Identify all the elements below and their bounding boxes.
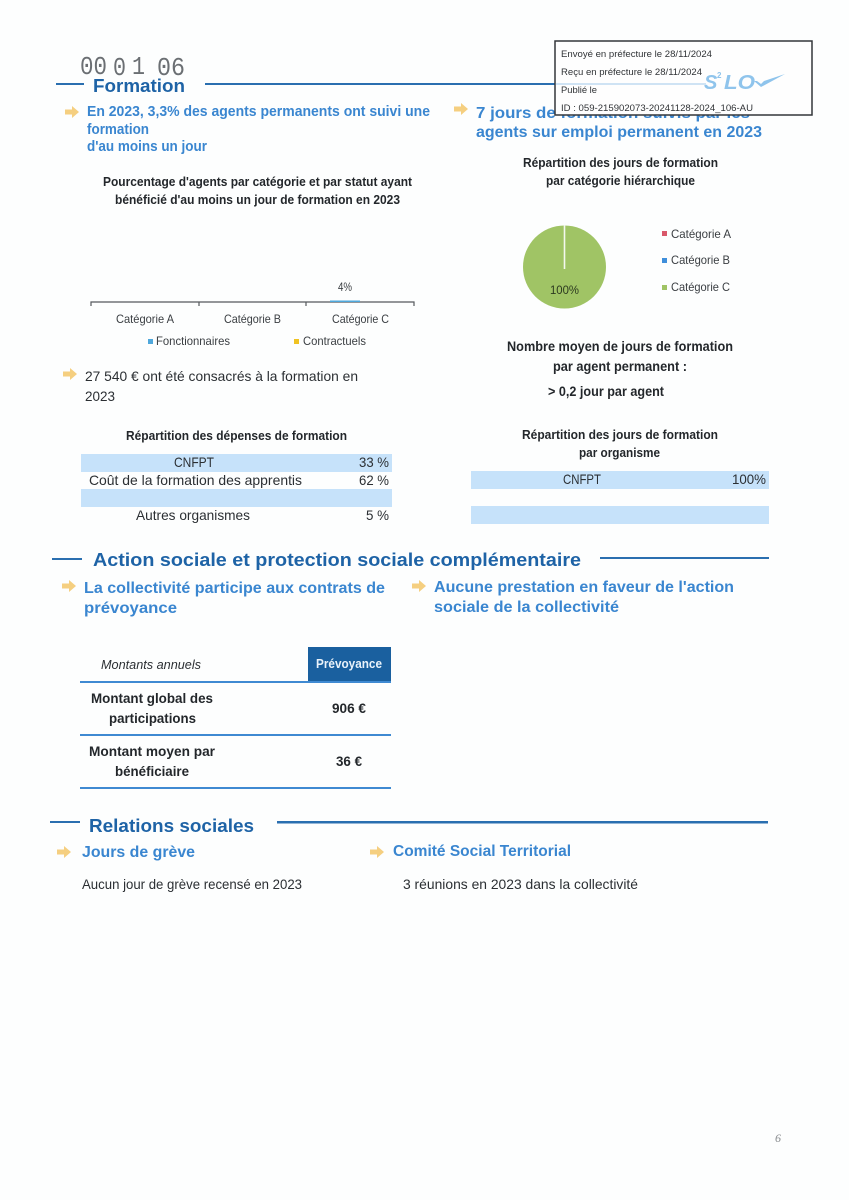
- chart title: agents by category: bénéficié d'au moins un jour de formation en 2023: [115, 193, 400, 207]
- table: days by organisation: par organisme: [579, 446, 660, 460]
- bar chart: agents by category: 4%: [338, 280, 352, 294]
- pie chart: days by category: Catégorie C: [671, 280, 730, 294]
- chart title: days by category: Répartition des jours de formation: [523, 156, 718, 170]
- table: training expenses: 62 %: [359, 472, 389, 488]
- stamp number: [80, 52, 185, 83]
- table: prévoyance amounts: Prévoyance: [316, 656, 382, 671]
- callout: days of training: [454, 103, 762, 141]
- callout: no social benefit: Aucune prestation en faveur de l'action: [434, 579, 734, 596]
- icon: S2LO logo: LO: [724, 72, 755, 94]
- text block: average training days: Nombre moyen de jours de formation: [507, 339, 733, 354]
- callout: training budget: [63, 368, 358, 404]
- page number: 6: [775, 1131, 781, 1145]
- table: days by organisation: Répartition des jours de formation: [522, 428, 718, 442]
- table: prévoyance amounts: Montant moyen par: [89, 744, 216, 759]
- pie chart: days by category: [523, 225, 731, 308]
- prefecture stamp box: [555, 41, 812, 115]
- prefecture stamp box: Publié le: [561, 85, 597, 96]
- pie chart: days by category: Catégorie B: [671, 253, 730, 267]
- table: prévoyance amounts: participations: [109, 711, 196, 726]
- stamp number: 1: [132, 52, 145, 82]
- text block: average training days: > 0,2 jour par agent: [548, 384, 664, 399]
- callout: prévoyance contracts: [62, 580, 385, 617]
- icon: S2LO logo: [704, 71, 785, 94]
- callout: training budget: 27 540 € ont été consacrés à la formation en: [85, 368, 358, 384]
- stamp number: 0: [113, 53, 126, 83]
- table: prévoyance amounts: [80, 647, 391, 789]
- bar chart: agents by category: Catégorie C: [332, 312, 389, 326]
- pie chart: days by category: 100%: [550, 283, 579, 297]
- block: social committee: 3 réunions en 2023 dans la collectivité: [403, 876, 638, 892]
- table: training expenses: [81, 429, 392, 523]
- prefecture stamp box: ID : 059-215902073-20241128-2024_106-AU: [561, 103, 753, 114]
- table: training expenses: Coût de la formation des apprentis: [89, 472, 302, 488]
- block: strike days: Aucun jour de grève recensé en 2023: [82, 876, 302, 892]
- section: Formation heading: Formation: [93, 76, 185, 96]
- stamp number: 00: [80, 52, 107, 82]
- table: prévoyance amounts: 36 €: [336, 754, 362, 769]
- table: prévoyance amounts: bénéficiaire: [115, 764, 189, 779]
- callout: share of agents trained: formation: [87, 121, 149, 138]
- callout: days of training: 7 jours de formation suivis par les: [476, 105, 750, 122]
- table: training expenses: 5 %: [366, 507, 389, 523]
- table: prévoyance amounts: 906 €: [332, 701, 366, 716]
- chart title: days by category: par catégorie hiérarchique: [546, 174, 695, 188]
- table: training expenses: Répartition des dépenses de formation: [126, 429, 347, 443]
- text block: average training days: par agent permanent :: [553, 359, 687, 374]
- table: prévoyance amounts: Montants annuels: [101, 657, 201, 672]
- bar chart: agents by category: Contractuels: [303, 334, 366, 348]
- section: Action sociale heading: Action sociale et protection sociale complémentaire: [93, 550, 581, 570]
- callout: no social benefit: [412, 579, 734, 616]
- block: social committee: Comité Social Territorial: [393, 843, 571, 860]
- callout: prévoyance contracts: prévoyance: [84, 600, 177, 617]
- stamp number: 06: [157, 53, 185, 83]
- callout: share of agents trained: [65, 103, 430, 155]
- block: social committee: [370, 843, 638, 892]
- prefecture stamp box: Reçu en préfecture le 28/11/2024: [561, 67, 702, 78]
- table: prévoyance amounts: Montant global des: [91, 691, 213, 706]
- bar chart: agents by category: Catégorie A: [116, 312, 174, 326]
- table: days by organisation: CNFPT: [563, 471, 601, 487]
- table: days by organisation: 100%: [732, 471, 766, 487]
- prefecture stamp box: Envoyé en préfecture le 28/11/2024: [561, 49, 712, 60]
- block: strike days: Jours de grève: [82, 844, 195, 861]
- bar chart: agents by category: [91, 280, 414, 348]
- table: training expenses: CNFPT: [174, 454, 214, 470]
- icon: S2LO logo: S: [704, 72, 718, 94]
- callout: share of agents trained: En 2023, 3,3% des agents permanents ont suivi une: [87, 103, 430, 120]
- chart title: days by category: [523, 156, 718, 188]
- callout: prévoyance contracts: La collectivité participe aux contrats de: [84, 580, 385, 597]
- bar chart: agents by category: Catégorie B: [224, 312, 281, 326]
- text block: average training days: [507, 339, 733, 399]
- table: training expenses: 33 %: [359, 454, 389, 470]
- block: strike days: [57, 844, 302, 892]
- table: days by organisation: [471, 428, 769, 524]
- pie chart: days by category: Catégorie A: [671, 227, 731, 241]
- callout: days of training: agents sur emploi permanent en 2023: [476, 124, 762, 141]
- callout: training budget: 2023: [85, 388, 115, 404]
- bar chart: agents by category: Fonctionnaires: [156, 334, 230, 348]
- table: training expenses: Autres organismes: [136, 507, 250, 523]
- chart title: agents by category: Pourcentage d'agents par catégorie et par statut ayant: [103, 175, 413, 189]
- callout: no social benefit: sociale de la collectivité: [434, 599, 619, 616]
- section: Relations sociales heading: Relations sociales: [89, 816, 254, 836]
- icon: S2LO logo: 2: [717, 71, 722, 80]
- chart title: agents by category: [103, 175, 413, 207]
- callout: share of agents trained: d'au moins un jour: [87, 138, 207, 155]
